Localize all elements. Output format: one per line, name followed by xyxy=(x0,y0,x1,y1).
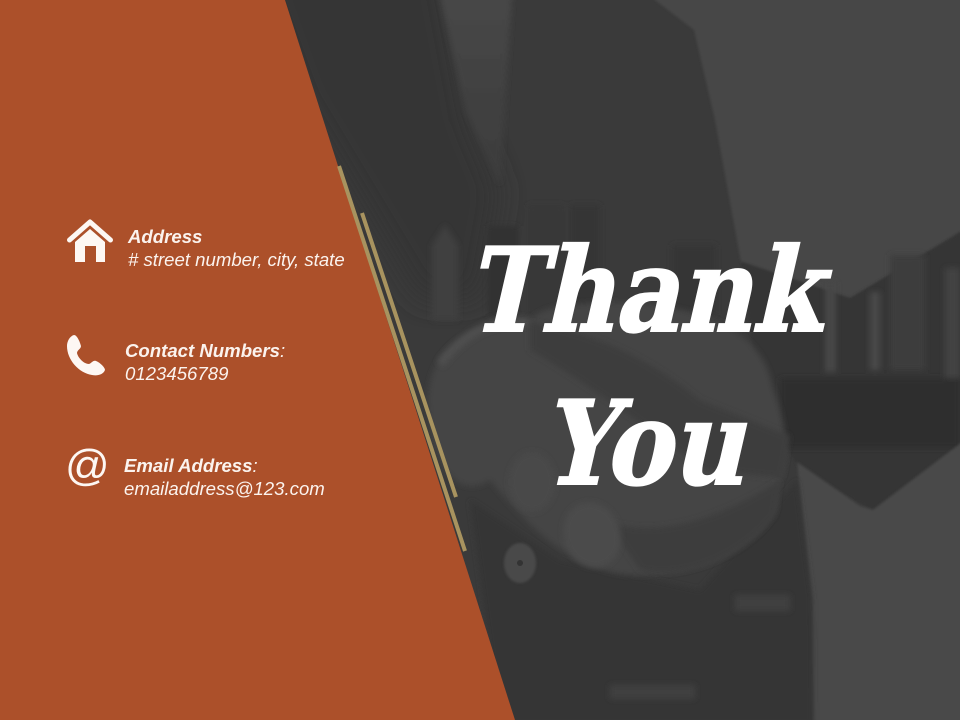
text: email address: Email Address: xyxy=(124,455,258,476)
title: Thank You: You xyxy=(533,375,768,511)
left dark jacket xyxy=(250,0,500,300)
text: address xyxy=(128,226,345,270)
icon: phone xyxy=(67,335,105,376)
text: email address xyxy=(124,455,325,499)
right lighter upper sleeve xyxy=(640,0,960,300)
icon: house xyxy=(67,219,113,262)
icon: at sign: @ xyxy=(65,441,110,490)
lower right sleeve xyxy=(797,440,960,720)
text: contact numbers: 0123456789 xyxy=(125,363,228,384)
text: address: Address xyxy=(128,226,202,247)
text: contact numbers: Contact Numbers: xyxy=(125,340,285,361)
city band xyxy=(741,230,960,510)
text: address: # street number, city, state xyxy=(128,249,345,270)
text: email address: emailaddress@123.com xyxy=(124,478,325,499)
shirt and tie xyxy=(436,0,513,185)
title: Thank You: Thank xyxy=(459,222,848,358)
lower jacket specks xyxy=(610,595,790,699)
handshake xyxy=(428,302,790,583)
text: contact numbers xyxy=(125,340,285,384)
lower jacket xyxy=(470,480,813,720)
